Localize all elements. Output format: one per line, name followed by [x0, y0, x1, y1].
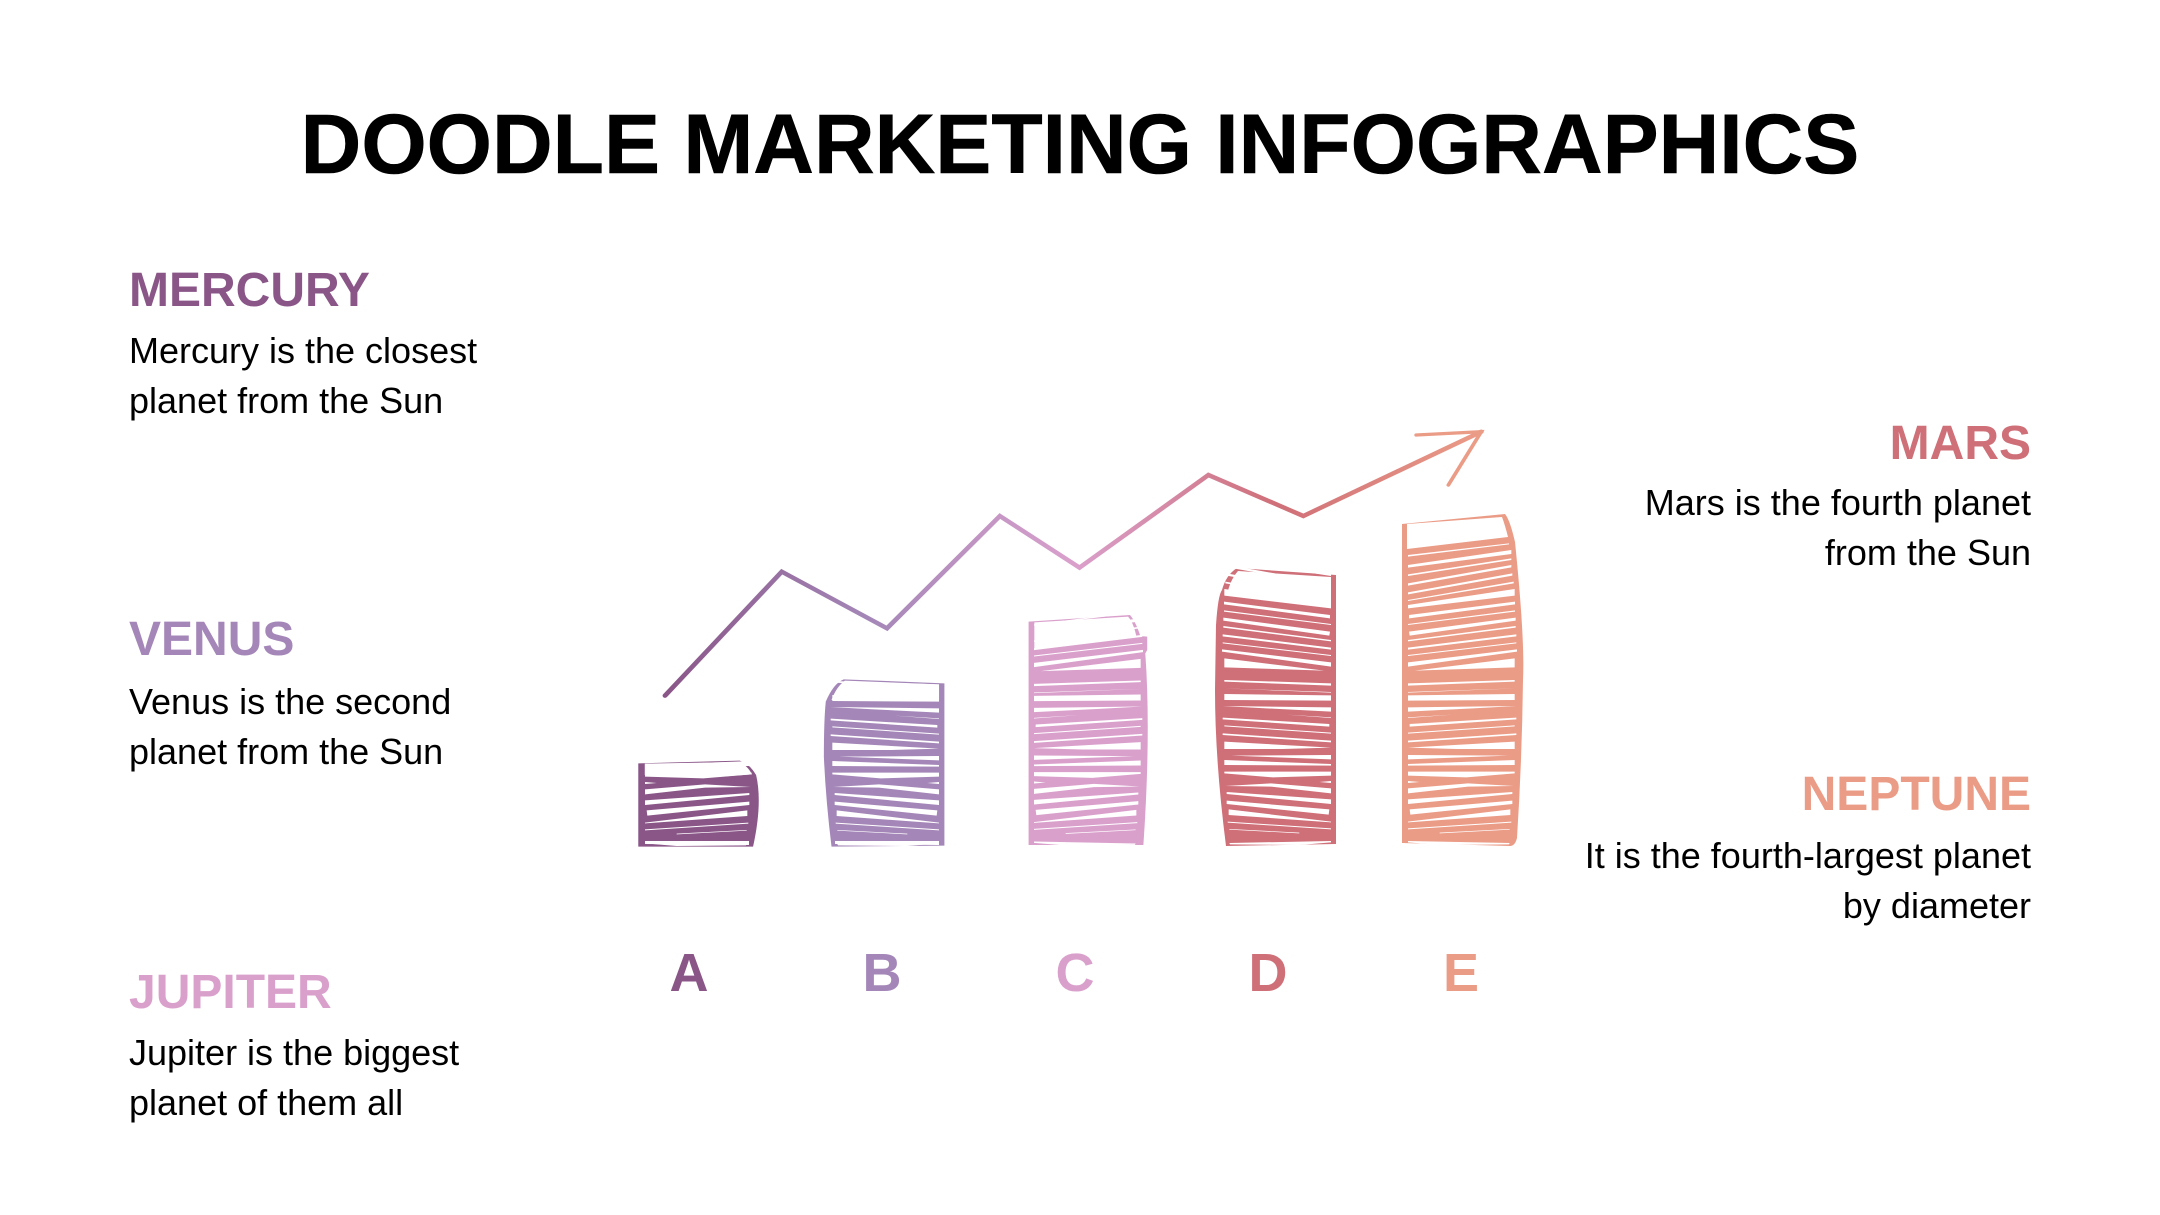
description: Mars: from the Sun — [1825, 532, 2031, 573]
arrow: rising trend line — [665, 432, 1481, 696]
description: Neptune: It is the fourth-largest planet — [1585, 835, 2031, 876]
description: Venus: Venus is the second — [129, 681, 451, 722]
heading: Neptune: NEPTUNE — [1802, 768, 2031, 821]
description: Mercury: Mercury is the closest — [129, 330, 477, 371]
bar A — [638, 544, 759, 847]
bar label B: B — [862, 943, 902, 1003]
text block: Mars — [1645, 417, 2031, 573]
heading: Venus: VENUS — [129, 613, 294, 666]
bar label D: D — [1248, 943, 1288, 1003]
text block: Neptune — [1585, 768, 2031, 926]
title: DOODLE MARKETING INFOGRAPHICS — [301, 97, 1859, 191]
bar B — [824, 544, 944, 847]
text block: Mercury — [129, 264, 477, 421]
heading: Mars: MARS — [1890, 417, 2031, 470]
bar D — [1215, 543, 1336, 846]
heading: Mercury: MERCURY — [129, 264, 370, 317]
description: Venus: planet from the Sun — [129, 731, 443, 772]
bar C — [1029, 544, 1148, 846]
bar label A: A — [670, 943, 708, 1003]
description: Neptune: by diameter — [1843, 885, 2031, 926]
description: Mars: Mars is the fourth planet — [1645, 482, 2031, 523]
bar label E: E — [1443, 943, 1479, 1003]
bar E — [1402, 514, 1523, 846]
heading: Jupiter: JUPITER — [129, 966, 332, 1019]
bar label C: C — [1056, 943, 1094, 1003]
description: Jupiter: planet of them all — [129, 1082, 403, 1123]
description: Jupiter: Jupiter is the biggest — [129, 1032, 459, 1073]
text block: Jupiter — [129, 966, 459, 1123]
description: Mercury: planet from the Sun — [129, 380, 443, 421]
text block: Venus — [129, 613, 451, 772]
